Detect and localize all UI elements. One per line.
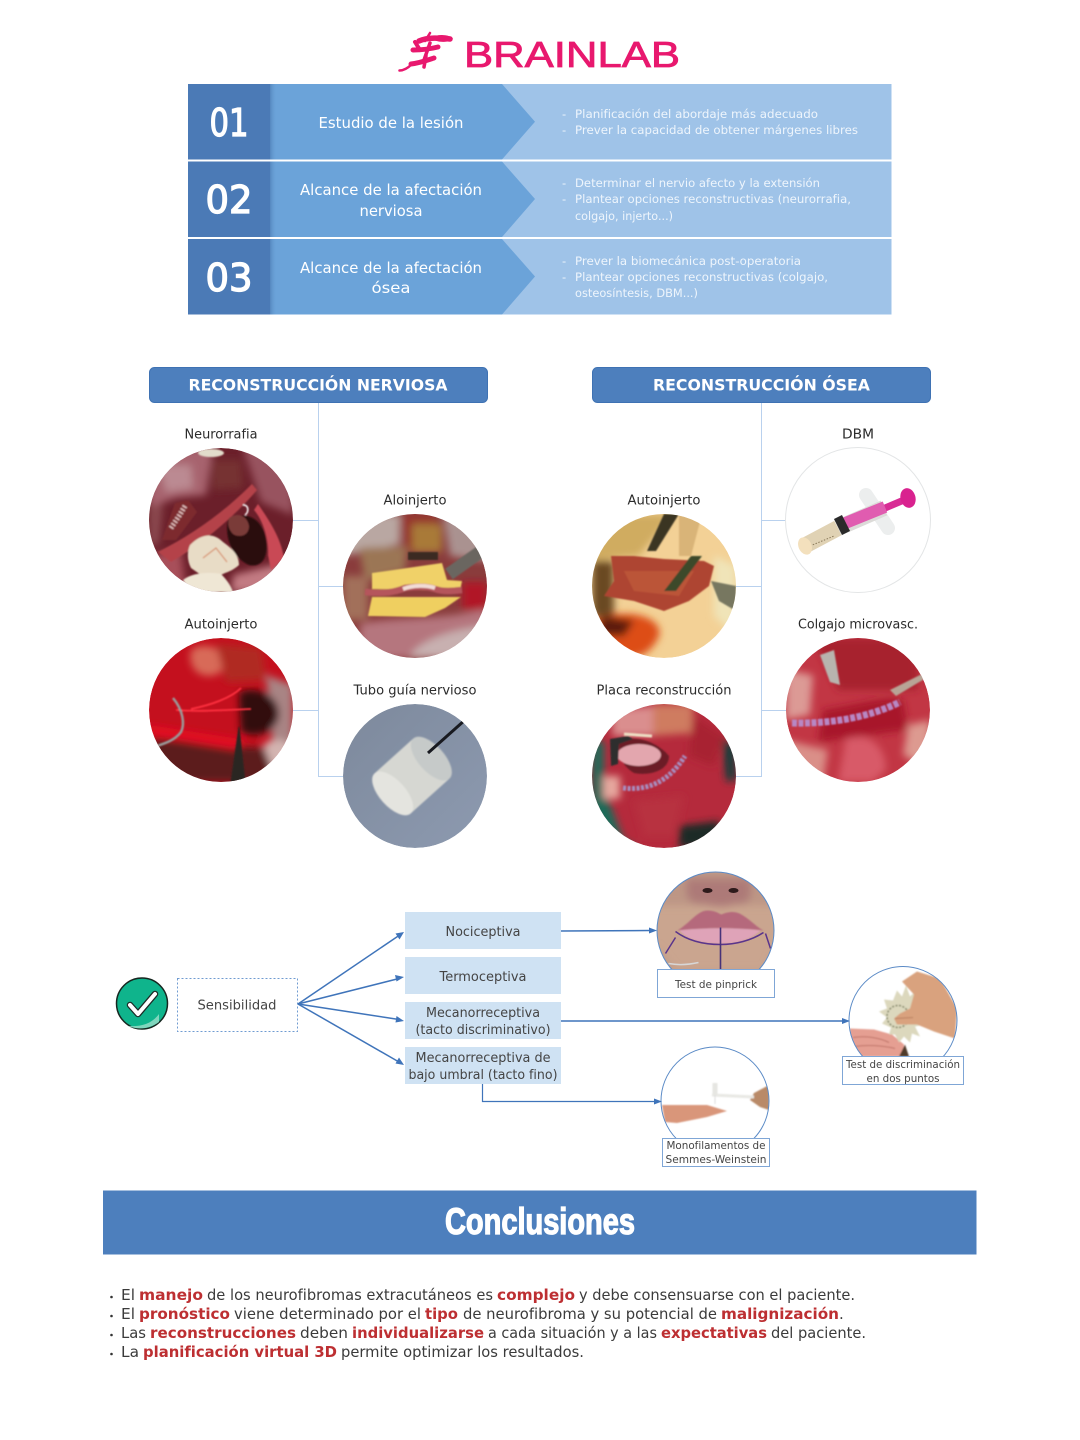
- bullet 2: de neurofibroma y su potencial de: [463, 1305, 717, 1323]
- bullet 2: malignización: [721, 1305, 839, 1323]
- panel: tabla de etapas: [188, 84, 892, 314]
- row 03: ósea: [372, 279, 410, 297]
- caption: test de discriminación en dos puntos: en dos puntos: [866, 1073, 940, 1085]
- bullet 2: viene determinado por el: [234, 1305, 421, 1323]
- row 01: Prever la capacidad de obtener márgenes libres: [575, 123, 858, 137]
- bullet 2: tipo: [425, 1305, 458, 1323]
- box: mecanorreceptiva de bajo umbral: bajo umbral (tacto fino): [408, 1068, 558, 1083]
- photo: colgajo microvascular: [786, 638, 930, 782]
- caption: test de pinprick: [658, 970, 774, 998]
- panel: reconstrucción nerviosa: [149, 368, 488, 848]
- arrow: mecanorreceptiva to dos puntos: [561, 1018, 850, 1024]
- icon: logo salamander: [400, 33, 452, 70]
- photo: autoinjerto nervioso: [149, 638, 293, 782]
- row 02: Alcance de la afectación: [300, 181, 482, 199]
- arrows from sensibilidad: [298, 932, 404, 1065]
- label: autoinjerto: Autoinjerto: [184, 618, 258, 632]
- heading: reconstrucción nerviosa: RECONSTRUCCIÓN NERVIOSA: [188, 376, 448, 394]
- bullet 3: a cada situación y a las: [488, 1324, 657, 1342]
- row 01: Estudio de la lesión: [318, 114, 464, 132]
- bullet 3: del paciente.: [771, 1324, 866, 1342]
- caption: monofilamentos de Semmes-Weinstein: Semmes-Weinstein: [666, 1154, 766, 1166]
- row 02: Determinar el nervio afecto y la extensión: [575, 176, 820, 190]
- caption: monofilamentos de Semmes-Weinstein: [662, 1138, 770, 1166]
- bullet 3: individualizarse: [352, 1324, 484, 1342]
- box: sensibilidad: [178, 978, 298, 1032]
- bullet 1: [110, 1286, 855, 1304]
- row 02: colgajo, injerto...): [575, 209, 673, 223]
- box: mecanorreceptiva de bajo umbral: [405, 1047, 561, 1084]
- caption: test de pinprick: Test de pinprick: [674, 979, 758, 991]
- box: mecanorreceptiva: [405, 1002, 561, 1039]
- bullet 1: complejo: [497, 1286, 575, 1304]
- row 01: Planificación del abordaje más adecuado: [575, 107, 818, 121]
- row 02: Plantear opciones reconstructivas (neurorrafia,: [575, 192, 851, 206]
- label: neurorrafia: Neurorrafia: [184, 428, 258, 442]
- wordmark: BRAINLAB: [464, 34, 680, 75]
- bullet 4: La: [121, 1343, 139, 1361]
- photo: autoinjerto óseo: [592, 514, 736, 658]
- row 03: Plantear opciones reconstructivas (colgajo,: [575, 270, 828, 284]
- bullet 2: .: [839, 1305, 844, 1323]
- photo: monofilamentos: [660, 1046, 770, 1138]
- row 03: [188, 239, 892, 314]
- bullet 1: y debe consensuarse con el paciente.: [579, 1286, 855, 1304]
- label: tubo guía nervioso: Tubo guía nervioso: [352, 684, 477, 698]
- box: sensibilidad: Sensibilidad: [198, 998, 276, 1014]
- label: placa reconstrucción: Placa reconstrucción: [596, 684, 732, 698]
- bullet 2: El: [121, 1305, 135, 1323]
- text block: conclusiones: [110, 1286, 866, 1361]
- row 03: 03: [206, 256, 252, 300]
- banner: conclusiones: Conclusiones: [445, 1201, 635, 1242]
- bullet 1: El: [121, 1286, 135, 1304]
- heading: reconstrucción ósea: [592, 368, 930, 402]
- bullet 4: [110, 1343, 584, 1361]
- box: mecanorreceptiva: Mecanorreceptiva: [426, 1006, 540, 1021]
- caption: test de discriminación en dos puntos: [842, 1056, 964, 1085]
- photo: test de discriminación en dos puntos: [848, 966, 958, 1056]
- row 01: -: [562, 107, 566, 121]
- row 03: osteosíntesis, DBM...): [575, 286, 698, 300]
- banner: conclusiones: [103, 1190, 976, 1254]
- icon: check: [116, 978, 168, 1029]
- bullet 3: [110, 1324, 866, 1342]
- box: mecanorreceptiva: (tacto discriminativo): [416, 1023, 550, 1038]
- photo: placa de reconstrucción: [592, 704, 736, 848]
- bullet 4: permite optimizar los resultados.: [341, 1343, 584, 1361]
- bullet 3: Las: [121, 1324, 146, 1342]
- bullet 2: [110, 1305, 844, 1323]
- bullet 3: deben: [300, 1324, 348, 1342]
- box: nociceptiva: [405, 912, 561, 949]
- caption: test de discriminación en dos puntos: Test de discriminación: [845, 1059, 960, 1071]
- photo: DBM syringe: [786, 448, 930, 592]
- photo: neurorrafia: [149, 448, 293, 592]
- row 03: -: [562, 270, 566, 284]
- box: termoceptiva: [405, 957, 561, 994]
- label: colgajo microvascular: Colgajo microvasc.: [798, 618, 918, 632]
- row 01: [188, 84, 892, 160]
- heading: reconstrucción nerviosa: [150, 368, 488, 402]
- panel: reconstrucción ósea: [592, 368, 930, 848]
- row 03: Prever la biomecánica post-operatoria: [575, 254, 801, 268]
- label: aloinjerto: Aloinjerto: [384, 494, 447, 508]
- bullet 4: planificación virtual 3D: [143, 1343, 337, 1361]
- row 01: -: [562, 123, 566, 137]
- bullet 3: expectativas: [661, 1324, 767, 1342]
- arrow: bajo umbral to monofilamentos: [482, 1084, 662, 1104]
- row 02: -: [562, 192, 566, 206]
- box: nociceptiva: Nociceptiva: [446, 925, 520, 940]
- panel: sensibilidad: [116, 870, 964, 1166]
- row 03: Alcance de la afectación: [300, 259, 482, 277]
- logo: Brainlab: [400, 33, 680, 75]
- bullet 1: de los neurofibromas extracutáneos es: [207, 1286, 493, 1304]
- caption: monofilamentos de Semmes-Weinstein: Monofilamentos de: [666, 1140, 766, 1152]
- row 02: -: [562, 176, 566, 190]
- row 02: 02: [206, 178, 252, 222]
- box: termoceptiva: Termoceptiva: [439, 970, 526, 985]
- row 02: [188, 162, 892, 237]
- row 03: -: [562, 254, 566, 268]
- bullet 1: manejo: [139, 1286, 203, 1304]
- bullet 2: pronóstico: [139, 1305, 230, 1323]
- row 01: 01: [210, 101, 248, 145]
- label: autoinjerto: Autoinjerto: [628, 494, 701, 508]
- photo: aloinjerto: [343, 514, 487, 658]
- bullet 3: reconstrucciones: [150, 1324, 296, 1342]
- heading: reconstrucción ósea: RECONSTRUCCIÓN ÓSEA: [653, 376, 871, 394]
- photo: tubo guía nervioso: [343, 704, 487, 848]
- label: DBM: DBM: [842, 428, 874, 442]
- arrow: nociceptiva to pinprick: [561, 928, 657, 934]
- row 02: nerviosa: [360, 202, 422, 220]
- box: mecanorreceptiva de bajo umbral: Mecanorreceptiva de: [416, 1051, 551, 1066]
- photo: test de pinprick: [656, 872, 774, 969]
